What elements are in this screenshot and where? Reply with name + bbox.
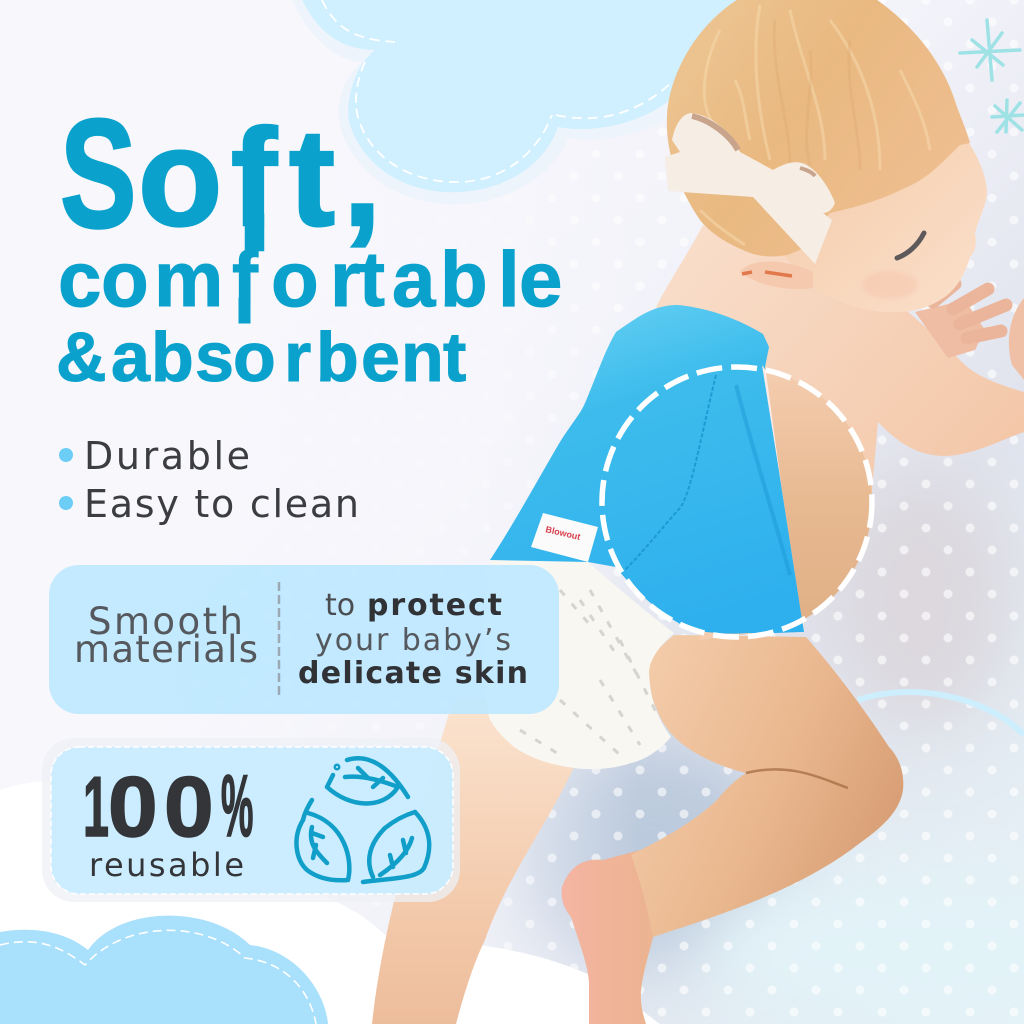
100 percent [83, 759, 253, 856]
panel: smooth materials: to [325, 588, 355, 623]
blue wrap [490, 305, 804, 634]
100 percent: 0 [108, 760, 158, 855]
title line: comfortable: comfortable [58, 235, 562, 323]
tan back inside circle [766, 370, 872, 618]
bullet list: Durable [84, 434, 250, 478]
panel: 100% reusable: reusable [89, 846, 244, 884]
title [56, 87, 562, 396]
title line: Soft: t [289, 101, 335, 255]
title line: Soft [60, 87, 381, 260]
sparkle icons [960, 20, 1024, 132]
face [770, 100, 987, 312]
100 percent: % [221, 759, 253, 856]
bow [665, 113, 835, 264]
panel: smooth materials: protect [367, 588, 502, 623]
hand [915, 284, 1024, 380]
torso and arm [640, 225, 1024, 640]
title line: absorbent: &absorbent [56, 318, 466, 396]
panel: 100% reusable [42, 738, 460, 902]
label [531, 513, 598, 562]
bullet list: Easy to clean [84, 482, 359, 526]
baby photo illustration [372, 0, 1024, 1024]
label: Blowout [545, 524, 581, 542]
panel: smooth materials [49, 565, 559, 714]
title line: Soft: f [231, 101, 278, 255]
dashed circle [602, 367, 872, 637]
diaper [483, 556, 674, 769]
panel: smooth materials: delicate skin [298, 656, 528, 691]
panel: smooth materials: your baby’s [315, 623, 511, 658]
icon: recycling leaves [296, 758, 429, 882]
lower-right cloud outline [858, 692, 1024, 735]
ear [740, 262, 813, 289]
near leg and foot [562, 635, 903, 1024]
bullet list [59, 434, 359, 526]
title line: Soft: o [138, 101, 222, 255]
lower-left white hill [0, 781, 660, 1024]
top cloud [290, 0, 752, 204]
eye [897, 233, 924, 258]
cheek [862, 271, 918, 299]
100 percent: 0 [164, 760, 214, 855]
far leg [372, 700, 574, 1024]
hair [667, 0, 970, 256]
title line: Soft: , [343, 101, 381, 255]
panel: smooth materials: materials [74, 628, 258, 671]
bottom-left cloud [0, 916, 328, 1024]
f descender [239, 298, 250, 323]
100 percent: 1 [83, 759, 109, 855]
panel: smooth materials: Smooth [88, 600, 243, 643]
title line: Soft: S [60, 87, 136, 260]
